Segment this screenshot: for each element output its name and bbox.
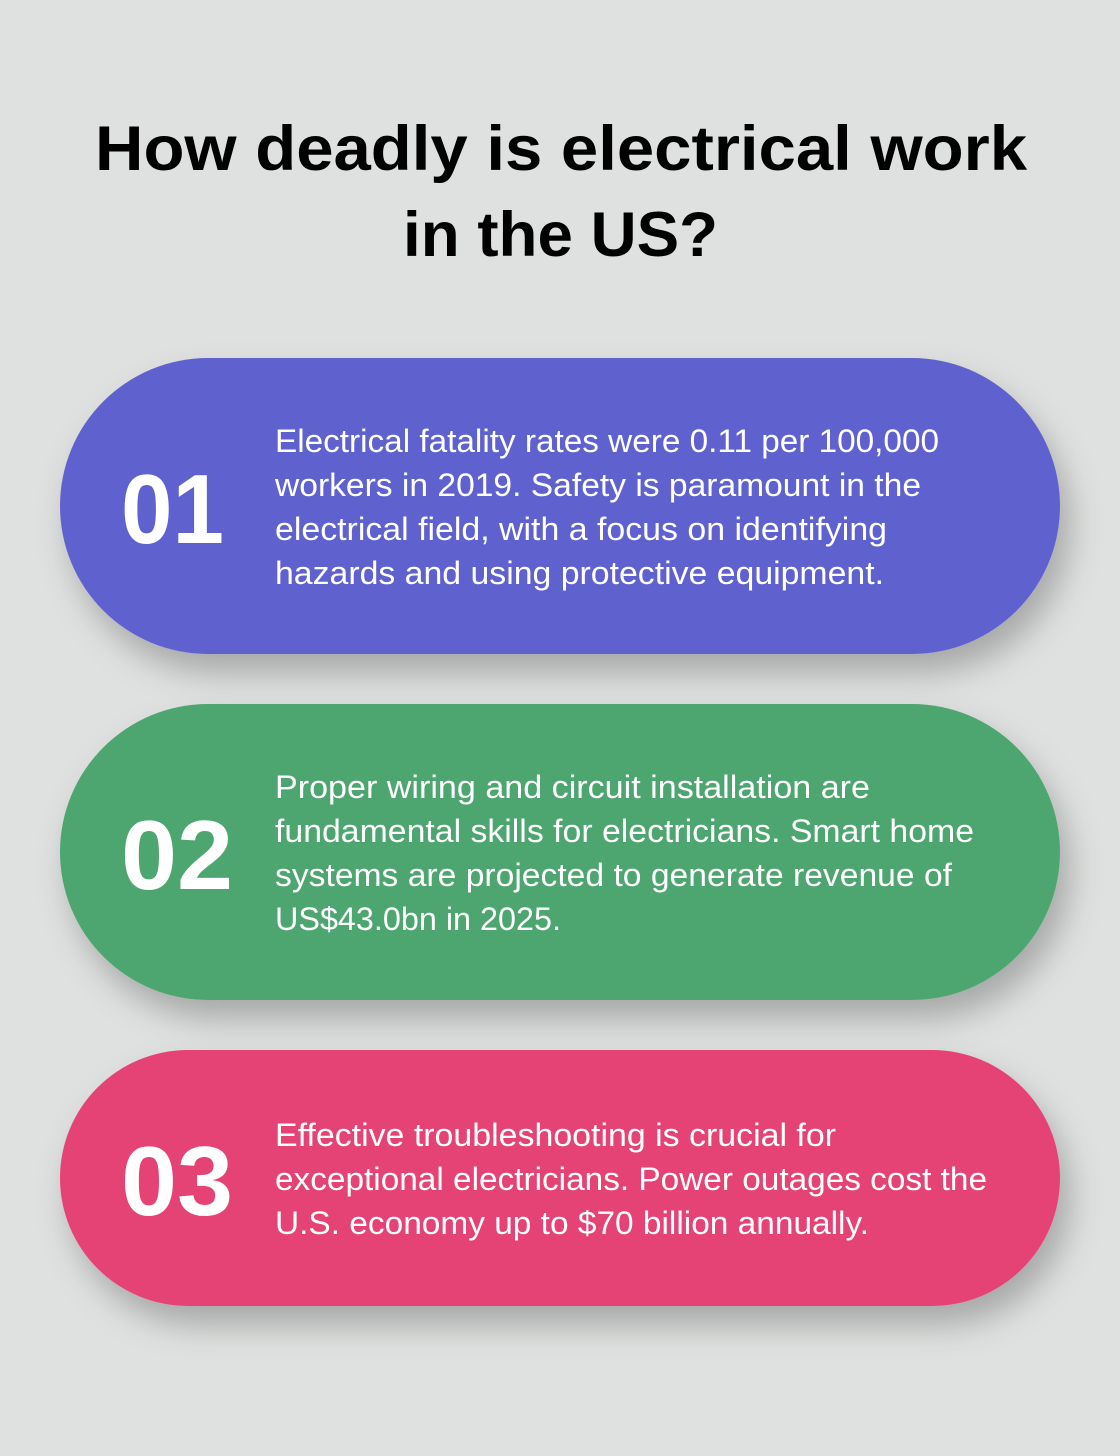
title: in the US? [403,200,718,270]
panel: step 03 [60,1050,1060,1306]
pill background: pink [60,1050,1060,1306]
text block: step 02: Proper wiring and circuit installation are [275,769,870,805]
number 03: 03 [121,1126,233,1236]
text block: step 02: US$43.0bn in 2025. [275,901,561,937]
pill background: purple [60,358,1060,654]
panel: step 01 [60,358,1060,654]
text block: step 01: hazards and using protective equipment. [275,555,884,591]
number 02: 02 [121,800,233,910]
text block: step 03 [275,1117,987,1241]
title [95,114,1028,270]
text block: step 02: systems are projected to generate revenue of [275,857,952,893]
text block: step 03: Effective troubleshooting is crucial for [275,1117,836,1153]
text block: step 01: electrical field, with a focus on identifying [275,511,887,547]
title: How deadly is electrical work [95,114,1028,184]
text block: step 01: Electrical fatality rates were 0.11 per 100,000 [275,423,939,459]
text block: step 01 [274,423,939,591]
text block: step 01: workers in 2019. Safety is paramount in the [274,467,921,503]
text block: step 03: U.S. economy up to $70 billion annually. [275,1205,869,1241]
pill background: green [60,704,1060,1000]
text block: step 03: exceptional electricians. Power outages cost the [275,1161,987,1197]
text block: step 02 [275,769,974,937]
panel: step 02 [60,704,1060,1000]
number 01: 01 [121,454,224,564]
text block: step 02: fundamental skills for electricians. Smart home [275,813,974,849]
